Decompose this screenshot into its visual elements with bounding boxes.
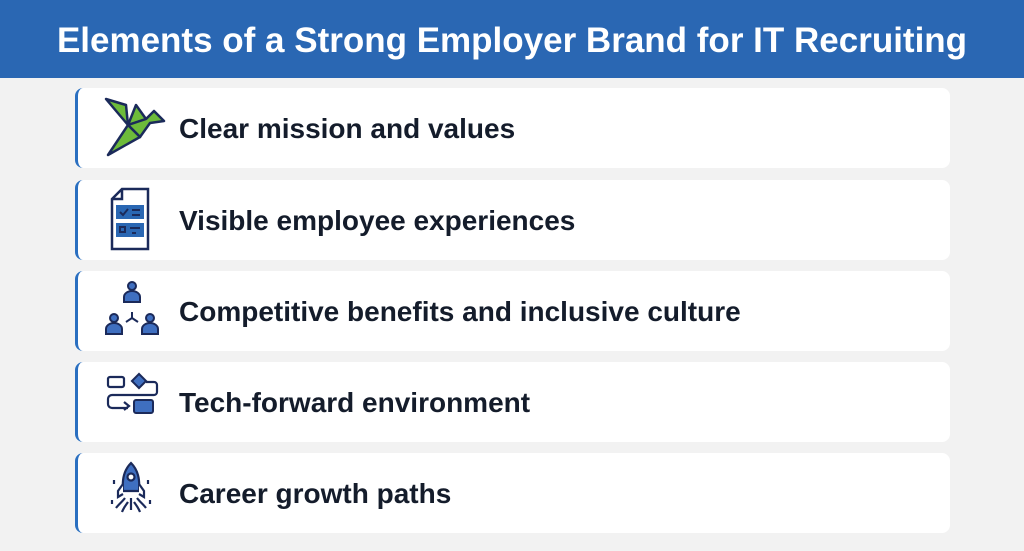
- text: Career growth paths: [179, 478, 451, 509]
- card: tech: [75, 362, 950, 442]
- card: benefits: [75, 271, 950, 351]
- icon: rocket: [110, 462, 152, 512]
- icon: checklist document: [110, 188, 150, 250]
- title: Elements of a Strong Employer Brand for IT Recruiting: [57, 21, 967, 60]
- title: [0, 0, 1024, 78]
- card: career: [75, 453, 950, 533]
- icon: flowchart: [106, 372, 158, 414]
- card: mission: [75, 88, 950, 168]
- card: experiences: [75, 180, 950, 260]
- text: Tech-forward environment: [179, 387, 530, 418]
- text: Competitive benefits and inclusive culture: [179, 296, 741, 327]
- icon: people network: [105, 281, 159, 335]
- icon: origami bird: [104, 98, 166, 156]
- text: Clear mission and values: [179, 113, 515, 144]
- text: Visible employee experiences: [179, 205, 575, 236]
